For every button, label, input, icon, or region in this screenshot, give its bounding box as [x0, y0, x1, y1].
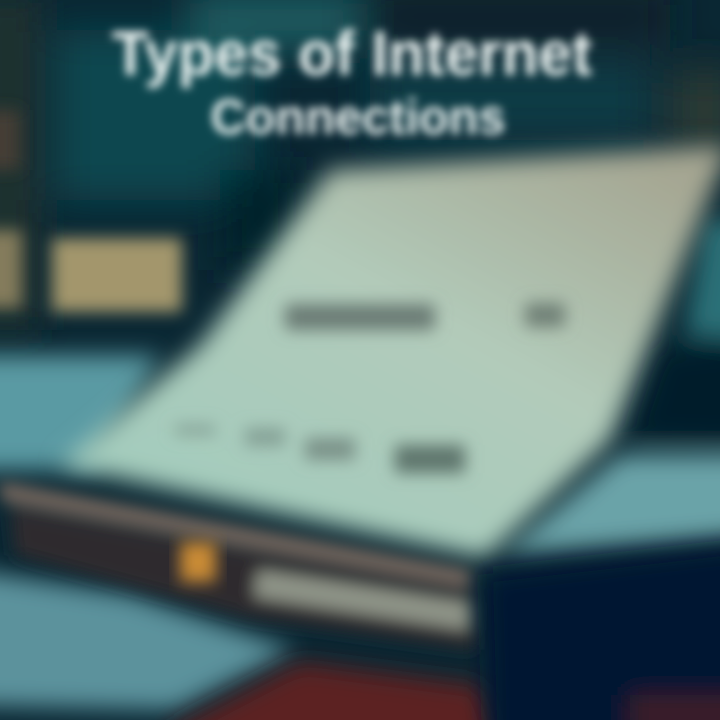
left light-blue surface — [0, 355, 160, 470]
right side surfaces — [500, 220, 720, 555]
icon: orange indicator light — [180, 542, 216, 582]
title: Connections — [210, 89, 506, 145]
dark base bottom right — [485, 545, 720, 720]
laptop edge — [0, 482, 475, 650]
left shelf: tan boxes — [0, 110, 182, 312]
title: Types of Internet — [112, 19, 592, 89]
desk: red-brown — [170, 662, 500, 720]
paper text: blurred lines — [175, 303, 565, 473]
laptop keyboard — [0, 570, 295, 710]
title — [112, 19, 592, 145]
paper sheet — [60, 145, 720, 558]
